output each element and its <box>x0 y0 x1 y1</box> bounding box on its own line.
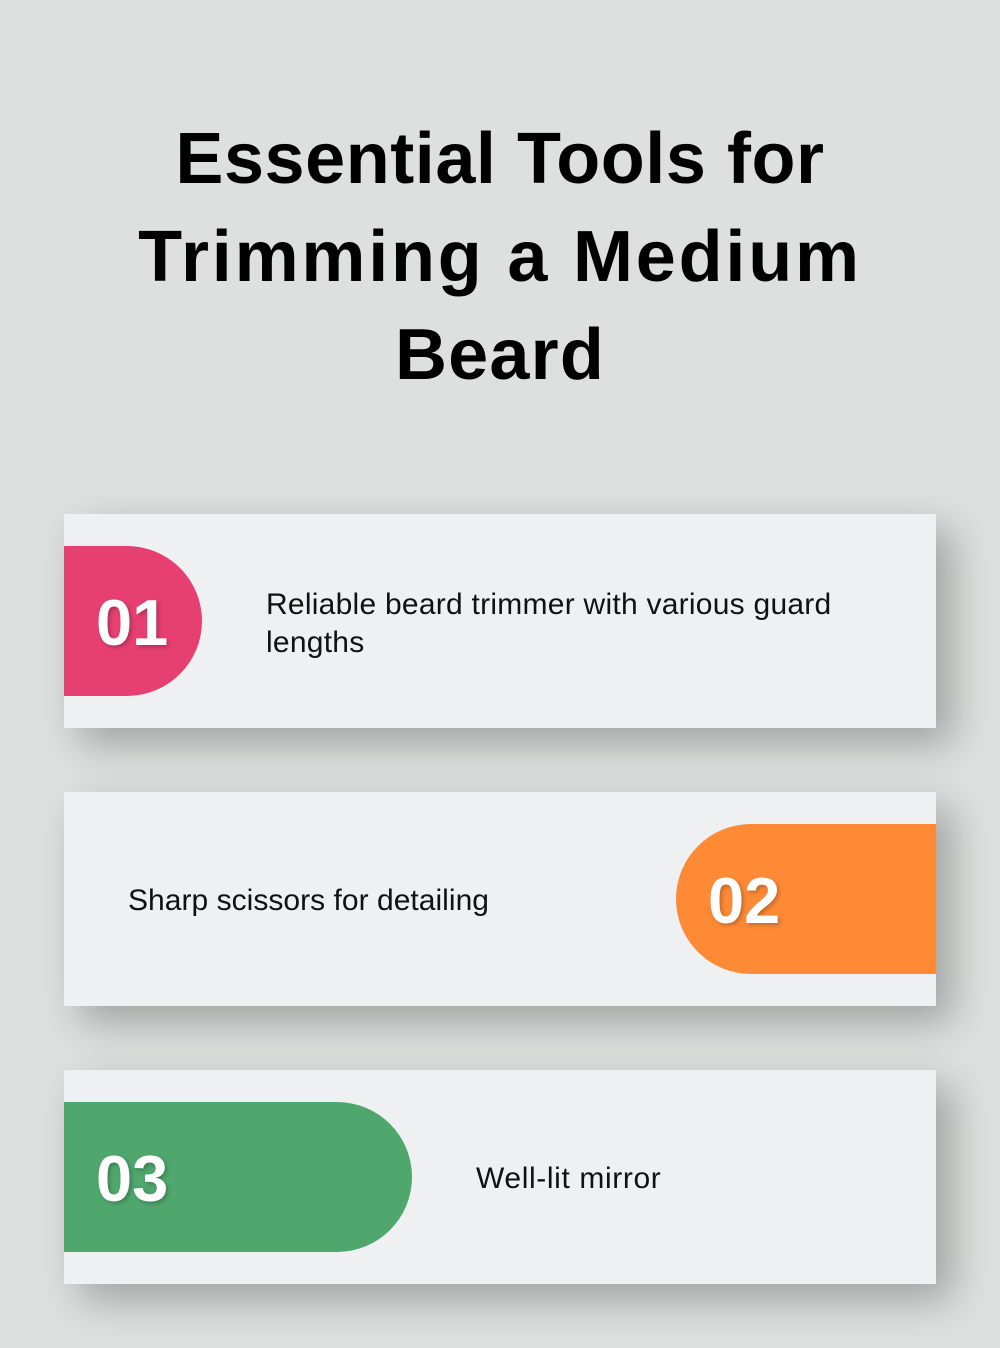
number badge 03 <box>64 1102 412 1252</box>
title: Beard <box>395 315 605 395</box>
text: mirror: Well-lit mirror <box>476 1162 661 1195</box>
title: Trimming a Medium <box>138 217 862 297</box>
title: Essential Tools for <box>175 119 825 199</box>
title <box>138 119 862 395</box>
number badge 03: 03 <box>96 1142 168 1215</box>
number badge 02 <box>676 824 936 974</box>
number badge 01: 01 <box>96 586 168 659</box>
text: trimmer: lengths <box>266 626 364 659</box>
panel: tool 02 <box>64 792 936 1006</box>
text: scissors: Sharp scissors for detailing <box>128 884 489 917</box>
panel: tool 01 <box>64 514 936 728</box>
number badge 01 <box>64 546 202 696</box>
panel: tool 03 <box>64 1070 936 1284</box>
text: trimmer: Reliable beard trimmer with various guard <box>266 588 831 621</box>
number badge 02: 02 <box>708 864 780 937</box>
text: trimmer <box>266 588 831 659</box>
